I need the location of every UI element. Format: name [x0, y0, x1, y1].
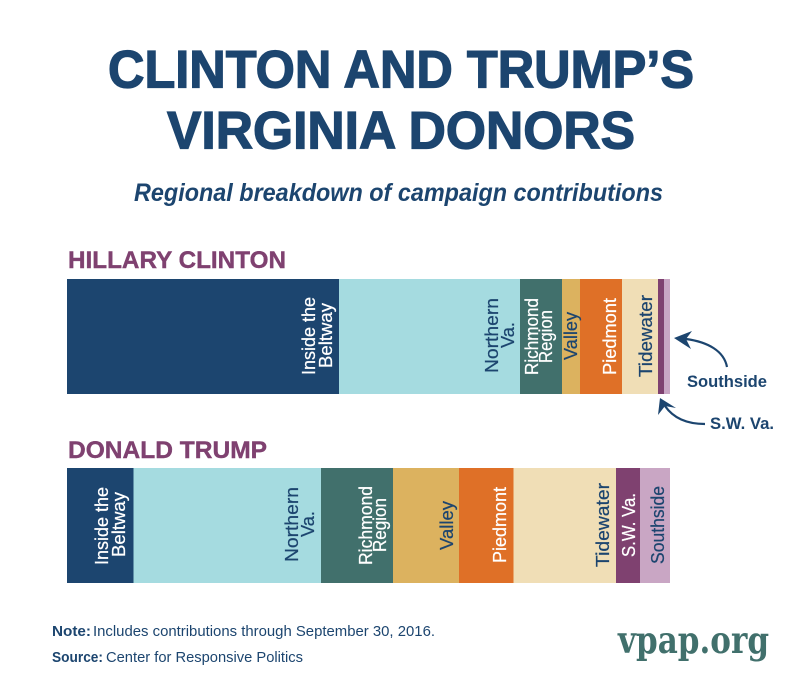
- segment labels: Trump: Beltway: [108, 491, 129, 557]
- callout: S.W. Va.: S.W. Va.: [710, 414, 774, 433]
- panel: Hillary Clinton: [67, 247, 774, 433]
- segment labels: Trump: Valley: [436, 500, 457, 550]
- segment labels: Clinton: Va.: [497, 322, 518, 348]
- heading: Donald Trump: DONALD TRUMP: [68, 437, 267, 464]
- callout: Southside: [674, 331, 767, 391]
- segment labels: Trump: Tidewater: [592, 483, 613, 567]
- segment labels: Trump: Va.: [297, 511, 318, 537]
- heading: Hillary Clinton: HILLARY CLINTON: [68, 247, 286, 274]
- segment labels: Clinton: Region: [535, 310, 556, 363]
- segment labels: Trump: Northern: [281, 487, 302, 562]
- logo: vpap.org: vpap.org: [617, 618, 769, 662]
- segment labels: Clinton: Valley: [560, 311, 581, 360]
- subtitle: Regional breakdown of campaign contributions: [134, 179, 663, 207]
- callout: Southside: Southside: [687, 372, 767, 391]
- title: CLINTON AND TRUMP’S: [108, 40, 694, 100]
- segment labels: Trump: Region: [369, 498, 390, 552]
- source: Center for Responsive Politics: [106, 649, 303, 666]
- segment labels: Clinton: [298, 295, 656, 377]
- segment labels: Clinton: Beltway: [315, 302, 336, 368]
- segment labels: Trump: Richmond: [355, 486, 376, 565]
- segment labels: Trump: [91, 483, 668, 567]
- segment labels: Trump: Piedmont: [489, 487, 510, 563]
- segment labels: Trump: Inside the: [91, 487, 112, 565]
- segment labels: Clinton: Northern: [481, 298, 502, 373]
- segment labels: Clinton: Inside the: [298, 297, 319, 375]
- segment labels: Clinton: Piedmont: [599, 298, 620, 375]
- callout: S.W. Va.: [658, 398, 774, 433]
- stacked bar: Clinton: [67, 279, 670, 394]
- segment labels: Clinton: Richmond: [521, 298, 542, 375]
- note: Note:: [52, 623, 91, 640]
- note: Includes contributions through September 30, 2016.: [93, 623, 435, 640]
- title: [108, 40, 694, 160]
- segment labels: Trump: Southside: [647, 486, 668, 564]
- panel: Donald Trump: [67, 437, 670, 583]
- title: VIRGINIA DONORS: [167, 102, 635, 160]
- segment labels: Trump: S.W. Va.: [618, 493, 639, 557]
- source: Source:: [52, 649, 103, 666]
- stacked bar: Trump: [67, 468, 670, 583]
- segment labels: Clinton: Tidewater: [635, 295, 656, 377]
